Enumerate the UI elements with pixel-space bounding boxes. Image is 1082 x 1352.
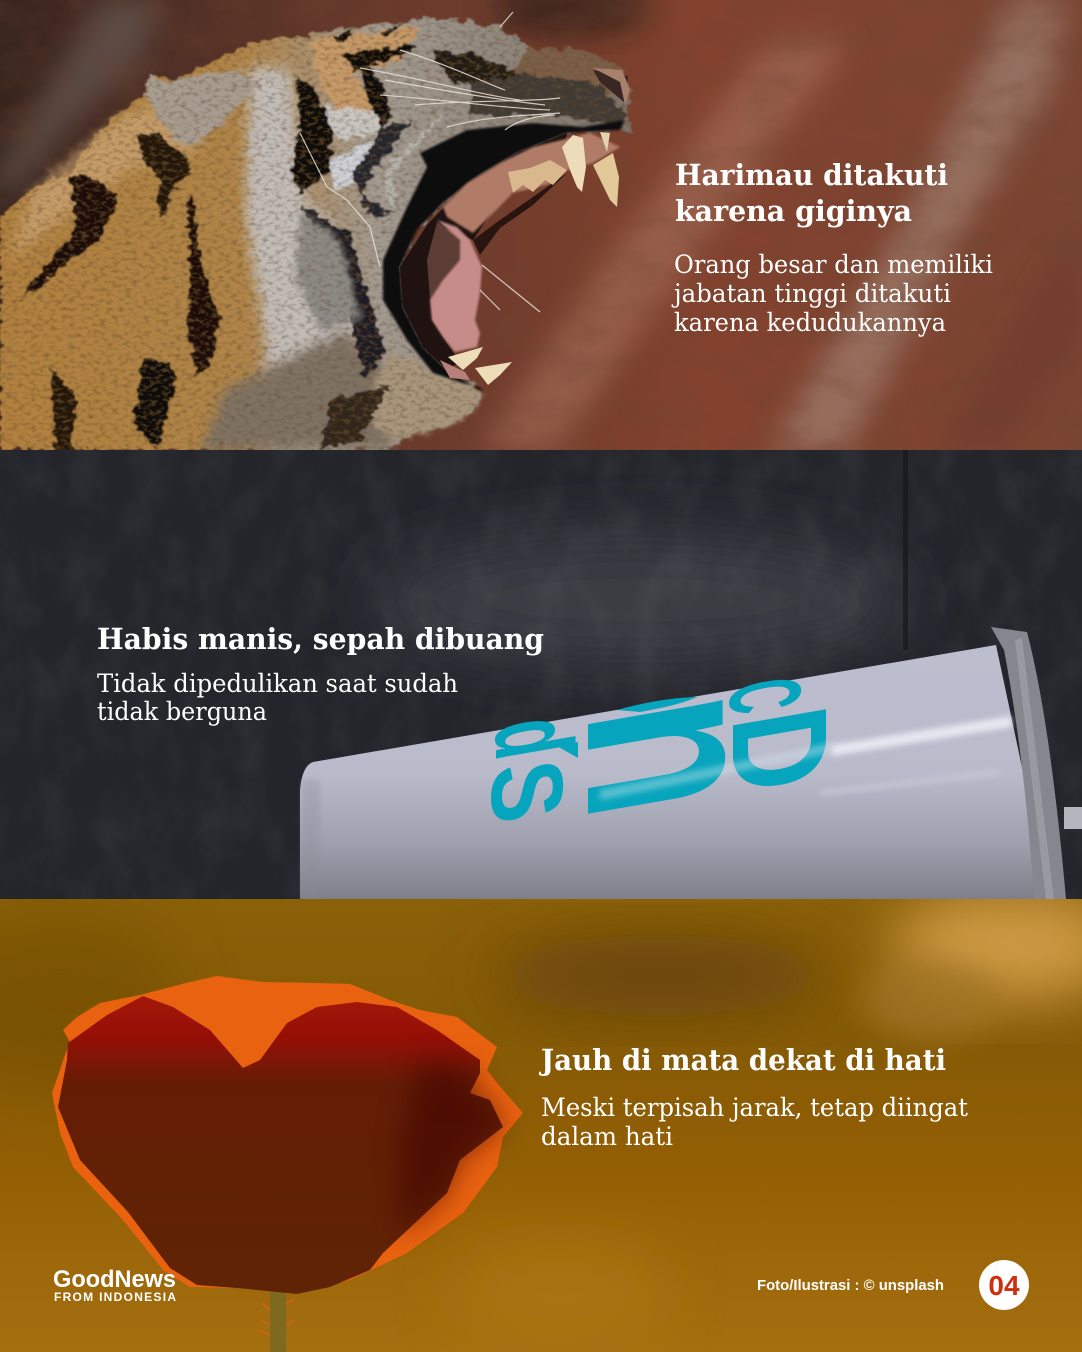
heading: tiger <box>675 158 948 228</box>
fur base <box>0 18 632 450</box>
cup highlight <box>832 716 1012 756</box>
page number badge <box>979 1260 1029 1310</box>
upper canine 2 <box>593 153 619 207</box>
cup logo sliver <box>555 697 697 758</box>
petal inner dark <box>58 996 503 1294</box>
nose rim <box>593 68 630 105</box>
lower gum <box>440 360 470 380</box>
heading: tiger: karena giginya <box>675 194 912 228</box>
lower canine <box>448 347 483 370</box>
panel: poppy flower <box>0 890 1082 1352</box>
text block: tiger meaning: jabatan tinggi ditakuti <box>671 279 951 308</box>
forehead orange <box>310 25 420 115</box>
palate <box>443 133 620 233</box>
petal right shadow <box>400 1060 503 1235</box>
tiger head and body <box>0 12 632 450</box>
cup highlight across logo <box>600 742 835 800</box>
photo background: dark wall <box>0 450 1082 899</box>
gray fur shade <box>295 210 360 330</box>
nose <box>593 70 628 103</box>
photo background: red rock wall <box>0 0 1082 450</box>
petal outer <box>52 976 523 1294</box>
tongue <box>430 220 482 352</box>
heading: poppy: Jauh di mata dekat di hati <box>538 1043 946 1077</box>
text block: poppy meaning: Meski terpisah jarak, tetap diingat <box>541 1093 968 1122</box>
heading: cup: Habis manis, sepah dibuang <box>97 622 544 656</box>
cup logo: d <box>472 708 594 767</box>
white cheek patch <box>327 143 372 190</box>
cup left edge wear <box>302 780 320 899</box>
gray muzzle <box>468 71 628 124</box>
white brow patch <box>320 105 385 140</box>
cup rim <box>991 627 1066 899</box>
cup logo: n <box>534 671 818 835</box>
straw stub <box>1064 807 1082 829</box>
cup <box>300 627 1082 899</box>
cup logo: C <box>708 670 822 721</box>
page number badge: 04 <box>988 1270 1020 1301</box>
small front tooth <box>600 132 610 152</box>
upper canine <box>562 135 586 192</box>
furred body group <box>0 18 632 450</box>
gray face stripe <box>385 113 443 212</box>
blue-gray face stripe <box>352 120 412 215</box>
dark stripes <box>20 22 520 450</box>
cup body <box>300 645 1050 899</box>
heading: tiger: Harimau ditakuti <box>675 158 948 192</box>
text block: cup meaning <box>97 669 458 726</box>
whiskers <box>300 12 560 312</box>
pale top edge of neck <box>10 105 200 260</box>
logo: GoodNews: FROM INDONESIA <box>54 1290 176 1304</box>
black mouth band <box>383 120 625 392</box>
text block: cup meaning: Tidak dipedulikan saat sudah <box>97 669 458 698</box>
mouth inner dark <box>400 133 567 370</box>
throat edge <box>473 173 567 255</box>
text block: poppy meaning: dalam hati <box>541 1122 673 1151</box>
tongue back <box>427 222 460 298</box>
snout top <box>510 48 630 100</box>
text block: tiger meaning <box>671 250 993 337</box>
photo credit: Foto/Ilustrasi : © unsplash <box>757 1278 944 1294</box>
cup logo: S <box>470 752 583 831</box>
ear <box>145 70 258 147</box>
logo: GoodNews: GoodNews <box>53 1266 176 1293</box>
pale cheek fur <box>245 65 360 450</box>
text block: cup meaning: tidak berguna <box>97 697 267 726</box>
photo background: amber blur <box>0 890 1082 1352</box>
cup logo: D <box>704 697 855 803</box>
text block: tiger meaning: Orang besar dan memiliki <box>674 250 993 279</box>
text block: poppy meaning <box>541 1093 968 1151</box>
incisor row <box>508 160 567 193</box>
chin fur <box>360 350 483 440</box>
poppy <box>52 976 523 1294</box>
panel: discarded cup <box>0 450 1082 899</box>
flower stem <box>258 1285 295 1352</box>
text block: tiger meaning: karena kedudukannya <box>674 308 946 337</box>
lower canine 2 <box>475 362 512 385</box>
cup rim shine <box>1015 638 1054 899</box>
cup highlight low <box>820 770 1000 796</box>
lower neck shade <box>200 330 420 450</box>
panel: tiger <box>0 0 1082 450</box>
